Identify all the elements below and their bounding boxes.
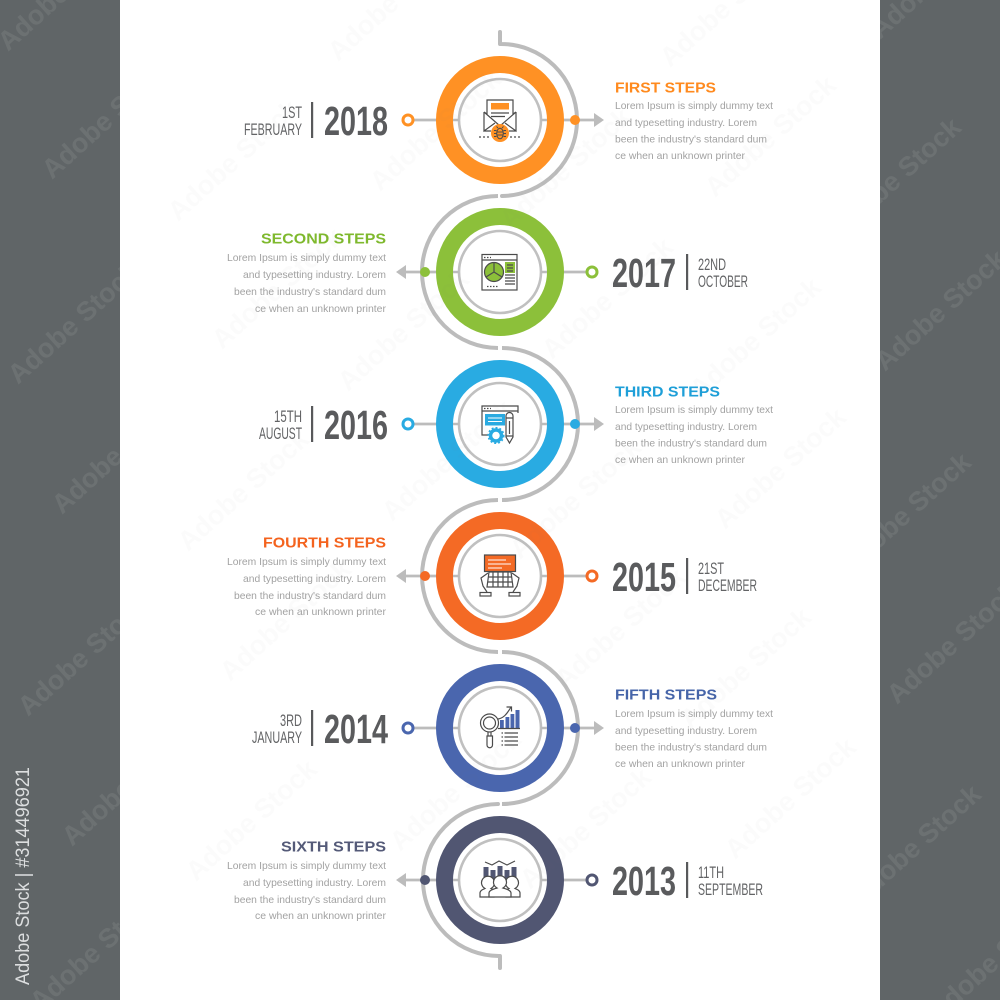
text block: ce when an unknown printer (255, 304, 387, 315)
step 4 (227, 520, 757, 632)
icon: web page with gear and pencil (482, 406, 518, 443)
step 6 (227, 824, 763, 936)
date: 22ND (698, 255, 726, 274)
date: 3RD (280, 711, 302, 730)
date: 2018 (324, 98, 388, 144)
text block: THIRD STEPS (615, 384, 720, 400)
text block: Lorem Ipsum is simply dummy text (615, 405, 773, 416)
date (612, 250, 748, 296)
text block (227, 838, 387, 922)
watermarks: Adobe Stock (719, 731, 862, 864)
watermarks: Adobe Stock (36, 51, 179, 184)
date: 21ST (698, 559, 724, 578)
icon: hands on laptop keyboard (480, 555, 520, 596)
watermarks: Adobe Stock (699, 69, 842, 202)
text block: been the industry's standard dum (234, 895, 386, 906)
connector and arrow (403, 417, 604, 431)
watermarks: Adobe Stock (824, 111, 967, 244)
date: AUGUST (259, 424, 302, 443)
text block (615, 384, 773, 466)
icon: envelope with bug (479, 100, 521, 142)
text block: FOURTH STEPS (263, 534, 386, 552)
text block: FIFTH STEPS (615, 686, 717, 704)
text block: ce when an unknown printer (255, 911, 387, 922)
date: 15TH (274, 407, 302, 426)
text block: been the industry's standard dum (615, 134, 767, 146)
watermarks: Adobe Stock (376, 393, 519, 526)
date: SEPTEMBER (698, 880, 763, 899)
ring (444, 520, 556, 632)
watermarks: Adobe Stock (214, 553, 357, 686)
watermarks: Adobe Stock (332, 263, 475, 396)
text block: and typesetting industry. Lorem (615, 726, 757, 737)
watermarks: Adobe Stock (172, 423, 315, 556)
watermarks: Adobe Stock (536, 231, 679, 364)
text block: been the industry's standard dum (234, 591, 386, 602)
text block: Lorem Ipsum is simply dummy text (615, 101, 773, 112)
step 2 (227, 216, 748, 328)
text block: been the industry's standard dum (615, 438, 767, 450)
text block (615, 80, 773, 162)
connector and arrow (403, 721, 604, 735)
watermarks: Adobe Stock (844, 778, 987, 911)
text block: been the industry's standard dum (234, 287, 386, 298)
watermarks: Adobe Stock (384, 723, 527, 856)
watermarks: Adobe Stock (12, 588, 155, 721)
timeline curve (422, 32, 578, 968)
date: 11TH (698, 863, 724, 882)
date: 2014 (324, 706, 388, 752)
date (244, 98, 388, 144)
date: 1ST (282, 103, 302, 122)
text block: and typesetting industry. Lorem (615, 422, 757, 433)
ring (444, 368, 556, 480)
date (252, 706, 388, 752)
date: 2013 (612, 858, 676, 904)
text block (227, 230, 387, 315)
text block: FIRST STEPS (615, 80, 716, 96)
watermarks: Adobe Stock (46, 386, 189, 519)
text block (615, 686, 773, 770)
text block: and typesetting industry. Lorem (243, 270, 386, 281)
watermarks: Adobe Stock (56, 718, 199, 851)
text block: ce when an unknown printer (615, 759, 746, 770)
date: 2015 (612, 554, 676, 600)
text block: SECOND STEPS (261, 230, 386, 248)
date: JANUARY (252, 728, 302, 747)
icon: dashboard with pie chart (482, 254, 517, 290)
text block: ce when an unknown printer (615, 455, 746, 466)
text block: and typesetting industry. Lorem (615, 118, 757, 129)
text block: Lorem Ipsum is simply dummy text (227, 253, 386, 264)
stock id label: Adobe Stock | #314496921 (13, 767, 34, 985)
text block: Lorem Ipsum is simply dummy text (227, 861, 386, 872)
watermarks: Adobe Stock (709, 401, 852, 534)
date: DECEMBER (698, 576, 757, 595)
watermarks: Adobe Stock (514, 761, 657, 894)
date (259, 402, 388, 448)
icon: magnifier with bar chart (480, 707, 520, 748)
left side band (0, 0, 120, 1000)
text block (227, 534, 387, 618)
step 3 (259, 368, 773, 480)
watermarks: Adobe Stock (504, 431, 647, 564)
connector and arrow (403, 113, 604, 127)
watermarks: Adobe Stock (180, 753, 323, 886)
watermarks: Adobe Stock (364, 63, 507, 196)
text block: Lorem Ipsum is simply dummy text (227, 557, 386, 568)
text block: been the industry's standard dum (615, 742, 767, 754)
step 1 (244, 64, 773, 176)
date (612, 554, 757, 600)
text block: and typesetting industry. Lorem (243, 878, 386, 889)
text block: SIXTH STEPS (281, 838, 386, 856)
ring (444, 64, 556, 176)
icon: team with line chart (480, 861, 520, 897)
watermarks: Adobe Stock (206, 221, 349, 354)
ring (444, 672, 556, 784)
date: OCTOBER (698, 272, 748, 291)
watermarks: Adobe Stock (162, 93, 305, 226)
watermarks: Adobe Stock (684, 271, 827, 404)
date (612, 858, 763, 904)
watermarks: Adobe Stock (674, 601, 817, 734)
text block: ce when an unknown printer (615, 151, 746, 162)
date: FEBRUARY (244, 120, 302, 139)
text block: and typesetting industry. Lorem (243, 574, 386, 585)
watermarks: Adobe Stock (2, 256, 145, 389)
watermarks: Adobe Stock (549, 561, 692, 694)
step 5 (252, 672, 773, 784)
connector and arrow (396, 569, 597, 583)
watermarks: Adobe Stock (834, 446, 977, 579)
text block: ce when an unknown printer (255, 607, 387, 618)
connector and arrow (396, 265, 597, 279)
ring (444, 216, 556, 328)
ring (444, 824, 556, 936)
text block: Lorem Ipsum is simply dummy text (615, 709, 773, 720)
date: 2017 (612, 250, 676, 296)
right side band (880, 0, 1000, 1000)
date: 2016 (324, 402, 388, 448)
watermarks: Adobe Stock (494, 101, 637, 234)
connector and arrow (396, 873, 597, 887)
